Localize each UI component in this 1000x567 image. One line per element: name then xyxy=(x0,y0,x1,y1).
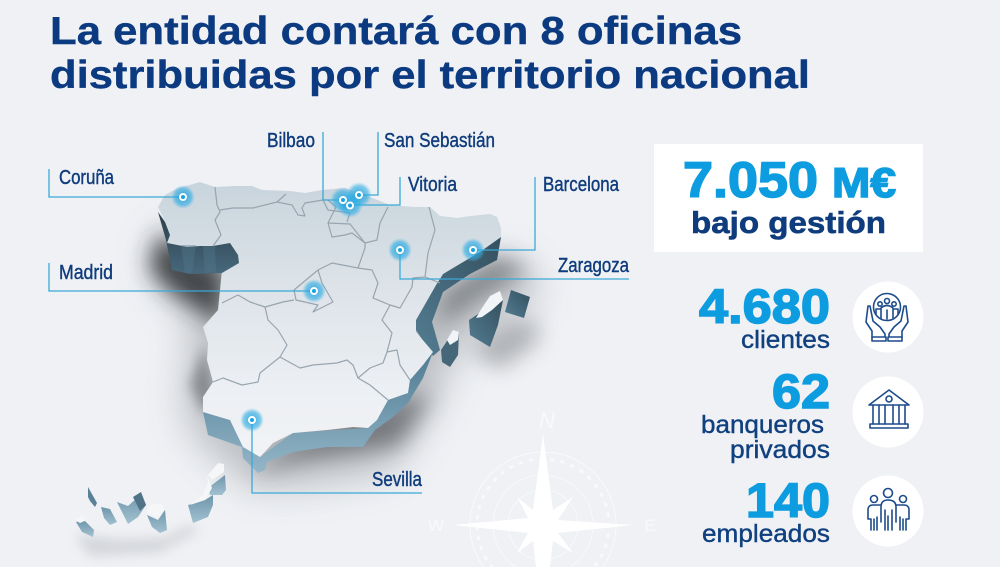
Galicia wall xyxy=(158,212,239,274)
icon: hands holding people xyxy=(852,282,924,352)
compass rose: W xyxy=(428,516,444,535)
city labels: Madrid xyxy=(59,262,113,284)
compass rose: E xyxy=(644,516,656,535)
city labels: Barcelona xyxy=(543,174,620,196)
city labels: Zaragoza xyxy=(558,255,630,277)
stat: private bankers: 62 xyxy=(772,366,830,419)
stat: clients: clientes xyxy=(741,326,830,354)
city labels: San Sebastián xyxy=(384,130,495,152)
map of Spain xyxy=(75,182,540,556)
city labels: Coruña xyxy=(59,167,115,189)
compass rose xyxy=(428,408,656,567)
panel: assets under management: bajo gestión xyxy=(691,205,886,240)
map shadows xyxy=(75,225,540,556)
city labels: Bilbao xyxy=(267,130,315,152)
south and east coastal walls xyxy=(203,352,433,473)
stat: clients: 4.680 xyxy=(699,281,830,334)
compass rose: N xyxy=(539,408,555,433)
region borders xyxy=(213,187,440,400)
stat: employees: empleados xyxy=(702,520,830,548)
icon: group of people xyxy=(852,476,924,546)
city labels xyxy=(59,130,630,491)
title: La entidad contará con 8 oficinas xyxy=(50,10,742,53)
callout lines xyxy=(49,132,629,493)
Canary Islands xyxy=(75,463,226,537)
mainland surface xyxy=(158,182,501,457)
icon: bank building xyxy=(852,376,924,448)
stat: clients xyxy=(699,281,830,354)
stat: private bankers: banqueros xyxy=(701,411,824,439)
stat: employees xyxy=(702,475,830,548)
office markers xyxy=(171,182,485,432)
city labels: Sevilla xyxy=(372,469,423,491)
title xyxy=(50,10,810,97)
panel: assets under management xyxy=(654,144,923,252)
city labels: Vitoria xyxy=(408,174,458,196)
Balearic Islands xyxy=(441,290,530,367)
panel: assets under management: M€ xyxy=(832,159,896,206)
stat: employees: 140 xyxy=(746,475,830,528)
panel: assets under management: 7.050 xyxy=(683,152,818,208)
stat: private bankers: privados xyxy=(730,436,830,464)
stat: private bankers xyxy=(701,366,830,464)
title: distribuidas por el territorio nacional xyxy=(50,54,810,97)
